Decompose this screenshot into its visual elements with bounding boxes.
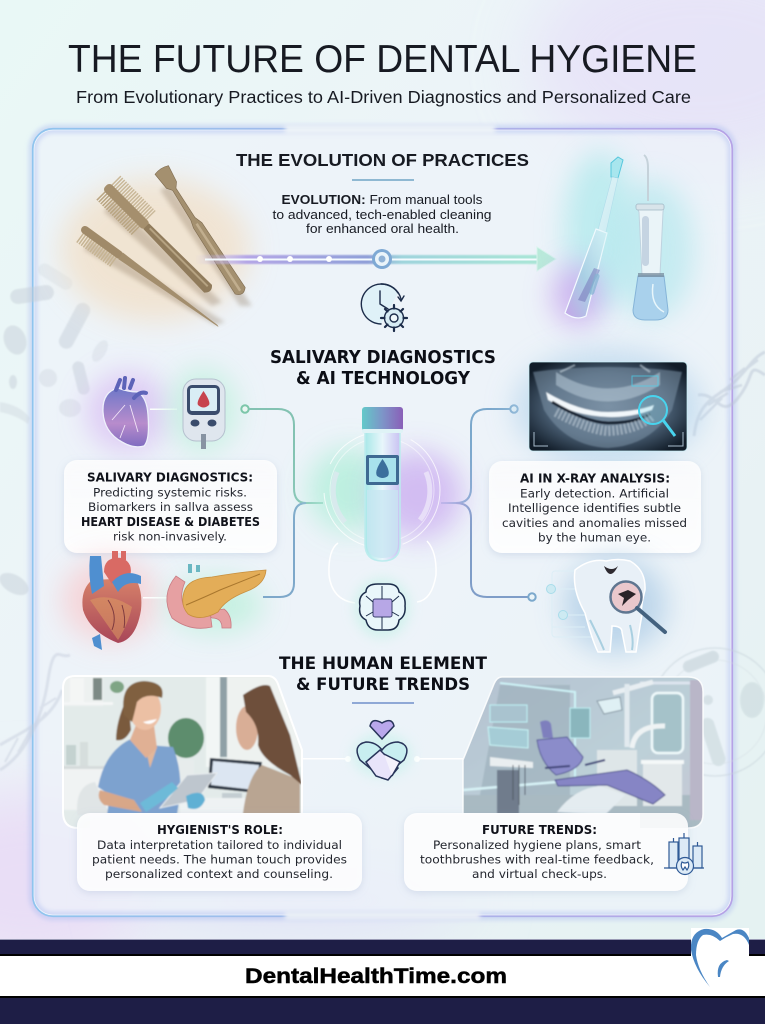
tube — [365, 428, 400, 561]
card: salivary diagnostics: risk non-invasively. — [113, 530, 227, 544]
card: hygienist's role: Data interpretation tailored to individual — [97, 838, 342, 852]
icon: AI brain — [354, 578, 410, 638]
evolution text: EVOLUTION: From manual tools — [282, 192, 483, 207]
evolution text — [272, 192, 492, 236]
timeline hub — [372, 249, 392, 269]
evolution text: for enhanced oral health. — [306, 221, 459, 236]
card: hygienist's role — [77, 813, 362, 891]
arcs between tube and brain — [329, 541, 436, 603]
magnifier — [639, 396, 675, 436]
card: AI in x-ray analysis: Early detection. Artificial — [520, 486, 669, 500]
card: future trends: Personalized hygiene plans, smart — [433, 838, 642, 852]
background decoration: DNA right — [694, 352, 765, 436]
icon: anatomical heart — [62, 551, 158, 650]
photo: hygienist and patient — [60, 673, 306, 831]
brush 2 — [99, 178, 218, 298]
HUD rings — [324, 432, 440, 548]
divider — [352, 702, 414, 704]
divider — [352, 179, 414, 181]
card: salivary diagnostics: SALIVARY DIAGNOSTICS: — [87, 470, 253, 484]
card: hygienist's role: HYGIENIST'S ROLE: — [157, 823, 283, 837]
card: future trends: and virtual check-ups. — [472, 867, 607, 881]
footer band — [0, 939, 765, 1024]
evolution text: to advanced, tech-enabled cleaning — [272, 207, 492, 222]
title: THE FUTURE OF DENTAL HYGIENE — [68, 38, 697, 81]
card: salivary diagnostics: Biomarkers in sallva assess — [88, 500, 253, 514]
logo: tooth — [691, 928, 749, 987]
subtitle: From Evolutionary Practices to AI-Driven Diagnostics and Personalized Care — [76, 87, 691, 107]
card: future trends: FUTURE TRENDS: — [482, 823, 597, 837]
section heading: salivary diagnostics: SALIVARY DIAGNOSTICS — [270, 348, 496, 368]
card: hygienist's role: patient needs. The human touch provides — [92, 852, 347, 866]
x-ray image — [513, 348, 703, 468]
central test tube with HUD rings — [308, 407, 462, 561]
section heading: human element: THE HUMAN ELEMENT — [279, 654, 488, 673]
icon: glucose meter — [169, 368, 237, 452]
frame — [33, 125, 732, 920]
card: future trends — [404, 813, 688, 891]
section heading: human element — [279, 654, 488, 694]
connector: heart to glucose meter — [150, 408, 177, 410]
section heading: human element: & FUTURE TRENDS — [296, 675, 470, 694]
data panel — [546, 571, 602, 637]
card: AI in x-ray analysis — [489, 461, 701, 553]
connector: heart to pancreas — [143, 597, 168, 598]
section heading: evolution: THE EVOLUTION OF PRACTICES — [236, 150, 529, 170]
background decoration: bacteria right and circle — [651, 648, 765, 776]
card: AI in x-ray analysis: AI IN X-RAY ANALYSIS: — [520, 472, 670, 486]
connector tree: right — [441, 405, 536, 601]
card: future trends: toothbrushes with real-time feedback, — [420, 852, 654, 866]
brush 3 — [77, 224, 221, 333]
card: salivary diagnostics — [64, 460, 277, 553]
connector tree: left — [241, 405, 323, 597]
modern electric toothbrush — [552, 152, 636, 327]
evolution arrow — [195, 247, 556, 271]
website: DentalHealthTime.com — [245, 964, 507, 988]
old dental tools — [60, 164, 252, 333]
background decoration: DNA left — [0, 654, 70, 770]
icon: purple heart — [86, 372, 170, 452]
icon: tooth with magnifier — [546, 557, 667, 653]
icon: pancreas — [167, 564, 266, 633]
section heading: salivary diagnostics: & AI TECHNOLOGY — [296, 369, 470, 389]
modern water flosser — [610, 155, 694, 320]
icon: clock and gear — [361, 284, 407, 331]
card: AI in x-ray analysis: by the human eye. — [538, 530, 651, 544]
icon: smart city with tooth — [664, 833, 704, 874]
card: salivary diagnostics: Predicting systemic risks. — [93, 486, 247, 500]
spatula tool — [154, 164, 249, 298]
icon: handshake and heart — [352, 721, 412, 780]
connectors to photos — [302, 756, 463, 762]
card: AI in x-ray analysis: Intelligence identifies subtle — [508, 501, 681, 515]
section heading: salivary diagnostics — [270, 348, 496, 389]
card: AI in x-ray analysis: cavities and anomalies missed — [502, 516, 687, 530]
card: salivary diagnostics: HEART DISEASE & DIABETES — [81, 515, 260, 529]
card: hygienist's role: personalized context and counseling. — [105, 867, 333, 881]
photo: futuristic dental room — [460, 674, 706, 832]
background decoration: bacteria left — [0, 261, 111, 600]
